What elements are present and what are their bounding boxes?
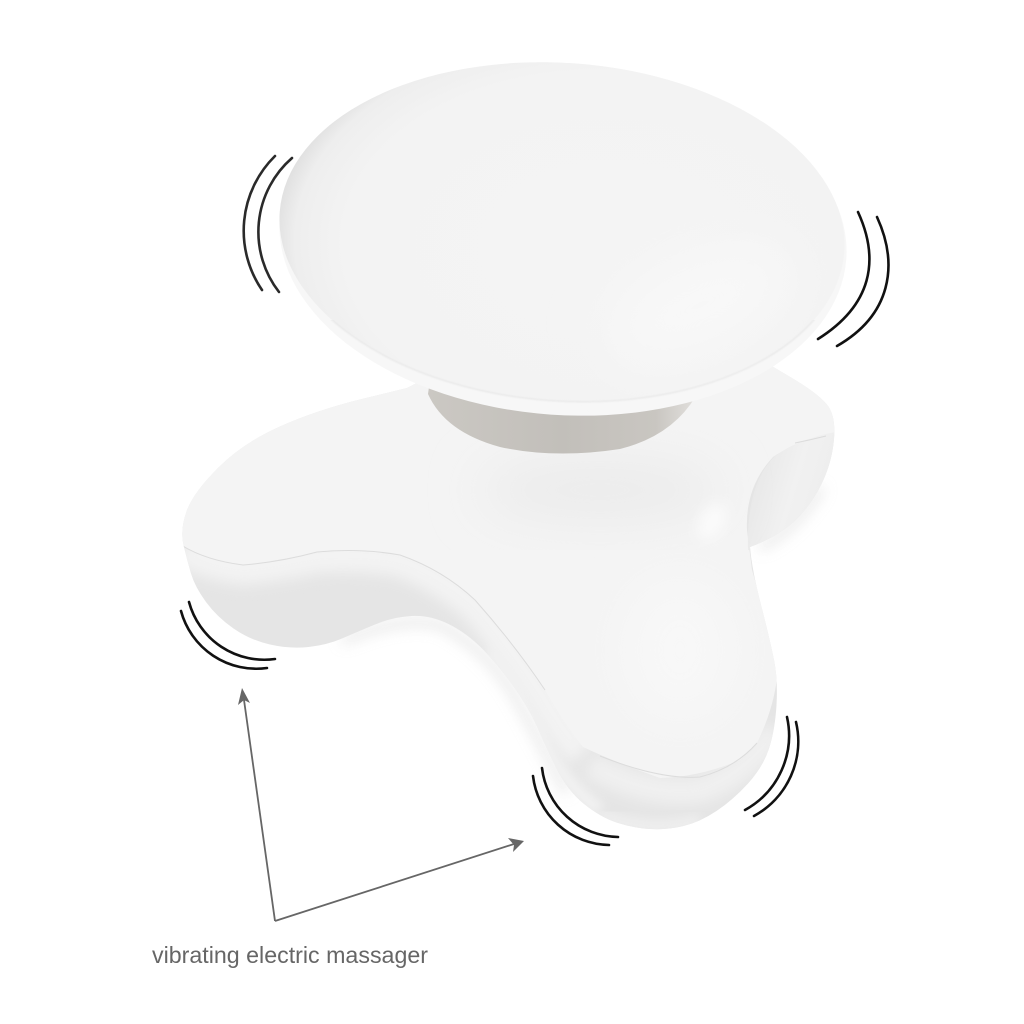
infographic canvas (152, 62, 890, 968)
seam line (178, 436, 826, 777)
head highlight (588, 217, 812, 393)
vibration arcs: bottom right (745, 717, 798, 816)
caption: vibrating electric massager (152, 942, 428, 968)
base body side wall (182, 340, 834, 829)
head under rim (267, 44, 859, 434)
side wall highlight (183, 548, 775, 826)
ground shadow (345, 490, 820, 790)
right lobe side wall (748, 432, 836, 550)
massager head (280, 62, 846, 416)
massager base (182, 366, 834, 830)
vibration arcs: head right (818, 212, 888, 346)
rim line (332, 320, 814, 402)
vibration arcs: head left (244, 156, 292, 292)
vibration arcs: bottom centre (533, 768, 618, 845)
base top surface (182, 367, 834, 778)
arrow: pointing up-left to massager (238, 688, 275, 921)
soft shading under head (480, 460, 735, 720)
head top face (268, 44, 856, 420)
vibration arcs: bottom left (181, 602, 275, 669)
neck joint (428, 380, 696, 454)
arrow: pointing right to massager (275, 838, 524, 921)
